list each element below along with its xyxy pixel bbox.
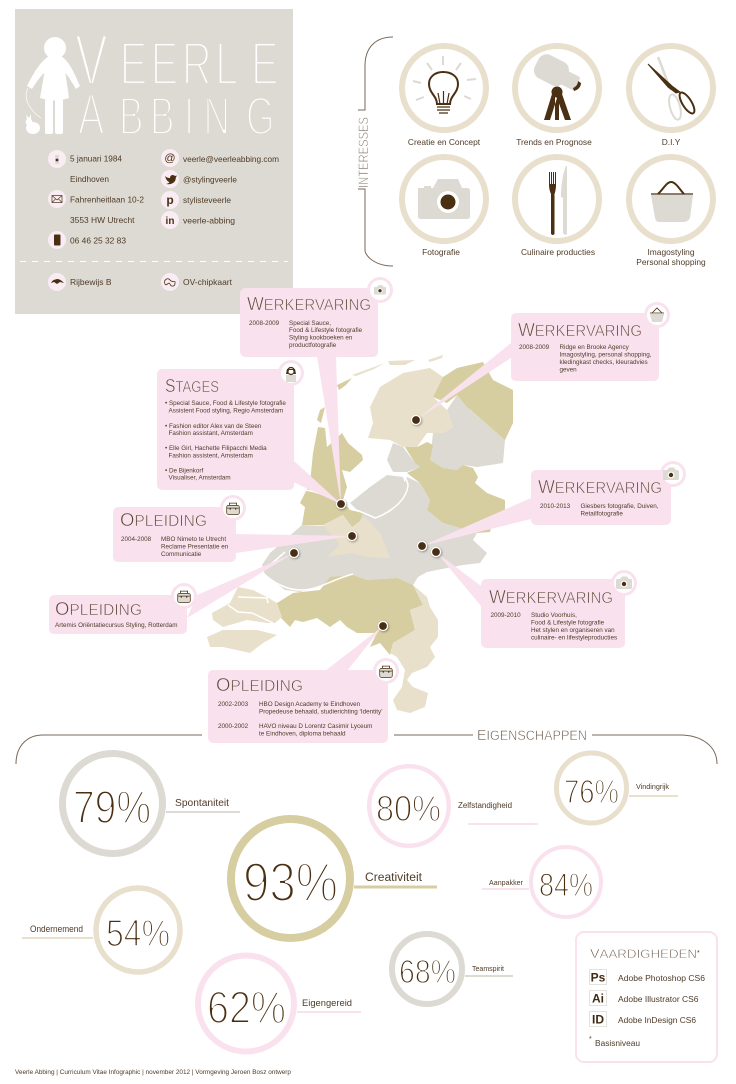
stat: aanpakker 84%: 84% xyxy=(539,867,593,903)
islands: wadden xyxy=(317,378,352,423)
callout: werkervaring ridge en brooke: geven xyxy=(560,366,577,374)
callout: opleiding design academy: te Eindhoven, diploma behaald xyxy=(259,730,346,738)
stat: vindingrijk 76% xyxy=(556,753,678,823)
contact icon: pinterest: p xyxy=(166,193,174,207)
stat: zelfstandigheid 80% xyxy=(369,766,538,846)
contact icon: pinterest xyxy=(161,191,179,209)
title: name: ABBING xyxy=(78,82,281,147)
interest: culinaire producties: Culinaire producties xyxy=(521,247,595,257)
callout: stages: STAGES xyxy=(165,375,219,396)
text: personal details: @stylingveerle xyxy=(183,174,237,184)
text: personal details: Rijbewijs B xyxy=(70,277,112,287)
callout: opleiding design academy: 2000-2002 xyxy=(218,723,249,730)
callout: stages: Fashion assistent, Amsterdam xyxy=(168,452,253,460)
map: the Netherlands xyxy=(207,355,513,713)
callout: stages: Assistent Food styling, Regio Amsterdam xyxy=(168,408,283,414)
icon: basket xyxy=(650,308,664,322)
interest: creatie en concept: Creatie en Concept xyxy=(408,137,481,147)
stat: creativiteit 93% xyxy=(231,819,437,938)
callout: werkervaring studio voorhuis xyxy=(436,552,637,648)
skill: photoshop: Ps xyxy=(591,970,606,984)
callout: werkervaring ridge en brooke: 2008-2009 xyxy=(519,344,550,351)
stat: eigengereid 62% xyxy=(198,956,361,1052)
contact icon: licence xyxy=(48,273,66,291)
contact icon: birth xyxy=(48,150,66,168)
callout: werkervaring 2008-2009 special sauce: Food & Lifestyle fotografie xyxy=(289,327,363,334)
panel: vaardigheden: VAARDIGHEDEN xyxy=(590,946,697,961)
interest: D.I.Y: D.I.Y xyxy=(662,137,681,147)
interest: culinaire producties xyxy=(515,157,599,257)
stat: aanpakker 84%: Aanpakker xyxy=(489,878,524,887)
stat: vindingrijk 76%: Vindingrijk xyxy=(636,782,669,791)
province: limburg xyxy=(390,585,438,713)
text: personal details: 5 januari 1984 xyxy=(70,154,122,164)
province: groningen xyxy=(433,362,513,440)
callout: stages: • Special Sauce, Food & Lifestyle fotografie xyxy=(165,400,286,407)
text: personal details: veerle@veerleabbing.com xyxy=(183,154,279,164)
icon: woman with rabbit xyxy=(26,37,80,134)
province: noord-holland xyxy=(300,427,363,527)
callout: opleiding design academy xyxy=(208,626,399,743)
stat: ondernemend 54%: 54% xyxy=(106,913,170,955)
contact icon: twitter xyxy=(161,170,179,188)
province: flevoland xyxy=(350,475,407,518)
stat: aanpakker 84% xyxy=(482,847,601,917)
text: personal details: 3553 HW Utrecht xyxy=(70,215,135,225)
skill: illustrator xyxy=(590,990,699,1006)
callout: stages xyxy=(157,360,341,504)
panel: profile xyxy=(15,9,293,314)
title: name: VEERLE xyxy=(75,20,282,101)
stat: ondernemend 54%: Ondernemend xyxy=(30,924,83,934)
interest: imagostyling xyxy=(629,157,713,267)
skill: indesign: ID xyxy=(592,1012,604,1026)
callout: werkervaring studio voorhuis: WERKERVARING xyxy=(489,586,613,607)
skill: photoshop xyxy=(590,970,705,984)
text: personal details: veerle-abbing xyxy=(183,216,235,226)
panel: interesses xyxy=(355,37,713,267)
callout: werkervaring ridge en brooke: Ridge en Brooke Agency xyxy=(560,344,630,351)
skill: illustrator: Ai xyxy=(592,992,604,1006)
stat: spontaniteit 79%: 79% xyxy=(73,781,151,833)
stat: teamspirit 68%: 68% xyxy=(399,953,456,990)
contact icon: phone xyxy=(48,231,66,249)
stat: teamspirit 68% xyxy=(392,934,513,1004)
province: zeeland xyxy=(207,587,282,653)
province: gray west and centre xyxy=(262,477,487,592)
skill: indesign: Adobe InDesign CS6 xyxy=(618,1015,696,1025)
stat: eigengereid 62%: Eigengereid xyxy=(302,998,352,1009)
callout: opleiding design academy: 2002-2003 xyxy=(218,701,249,708)
callout: werkervaring 2008-2009 special sauce: 2008-2009 xyxy=(249,320,280,327)
section: eigenschappen heading xyxy=(16,727,717,764)
callout: opleiding design academy: HBO Design Academy te Eindhoven xyxy=(259,701,361,708)
stat: spontaniteit 79% xyxy=(62,754,240,854)
contact icon: at: @ xyxy=(164,152,176,164)
province: friesland xyxy=(368,368,453,447)
callout: werkervaring studio voorhuis: Het stylen en organiseren van xyxy=(531,627,615,634)
stat: zelfstandigheid 80%: 80% xyxy=(376,788,441,829)
interest: imagostyling: Imagostyling xyxy=(647,247,695,257)
interest: trends en prognose: Trends en Prognose xyxy=(516,137,592,147)
skill: photoshop: Adobe Photoshop CS6 xyxy=(618,973,705,983)
stat: zelfstandigheid 80%: Zelfstandigheid xyxy=(458,801,512,810)
text: personal details: 06 46 25 32 83 xyxy=(70,236,126,246)
panel: vaardigheden: * xyxy=(589,1036,592,1043)
province: utrecht xyxy=(323,515,390,558)
province: overijssel xyxy=(405,442,505,533)
rivers xyxy=(228,472,408,623)
callout: werkervaring giesbers: Retailfotografie xyxy=(580,510,623,518)
contact icon: linkedin xyxy=(161,211,179,229)
stat: eigengereid 62%: 62% xyxy=(207,982,286,1033)
callout: opleiding MBO: Communicatie xyxy=(161,551,202,558)
text: personal details: OV-chipkaart xyxy=(183,277,233,287)
callout: werkervaring 2008-2009 special sauce xyxy=(240,277,393,504)
text: personal details: Fahrenheitlaan 10-2 xyxy=(70,194,144,204)
callout: werkervaring studio voorhuis: culinaire- en lifestyleproducties xyxy=(531,634,617,642)
icon: stagiair xyxy=(286,368,296,382)
callout: werkervaring ridge en brooke: kledingkast checks, kleuradvies xyxy=(560,359,648,366)
callout: werkervaring giesbers: Giesbers fotografie, Duiven, xyxy=(580,503,659,510)
contact icon: ov card xyxy=(161,273,179,291)
callout: werkervaring giesbers: 2010-2013 xyxy=(540,503,571,510)
callout: werkervaring giesbers xyxy=(422,461,686,546)
callout: stages: • De Bijenkorf xyxy=(165,468,204,474)
callout: werkervaring 2008-2009 special sauce: productfotografie xyxy=(289,342,337,349)
callout: stages: • Fashion editor Alex van de Steen xyxy=(165,423,262,430)
callout: opleiding MBO: Reclame Presentatie en xyxy=(161,544,229,550)
callout: opleiding artemis xyxy=(49,553,294,634)
text: personal details: stylisteveerle xyxy=(183,195,231,205)
stat: teamspirit 68%: Teamspirit xyxy=(472,964,504,973)
stat: creativiteit 93%: 93% xyxy=(243,851,338,913)
callout: opleiding design academy: Propedeuse behaald, studierichting ‘Identity’ xyxy=(259,708,383,716)
province: noord-brabant xyxy=(277,575,423,655)
interest: D.I.Y xyxy=(629,46,713,147)
callout: werkervaring ridge en brooke: Imagostyling, personal shopping, xyxy=(560,352,652,358)
callout: opleiding artemis: OPLEIDING xyxy=(55,598,142,619)
map location markers xyxy=(290,416,440,630)
callout: opleiding MBO: OPLEIDING xyxy=(120,509,207,530)
heading: interesses: INTERESSES xyxy=(355,117,371,188)
contact icon: mail xyxy=(48,190,66,208)
callout: opleiding MBO: MBO Nimeto te Utrecht xyxy=(161,536,226,543)
callout: stages: Visualiser, Amsterdam xyxy=(168,474,231,482)
callout: opleiding MBO xyxy=(113,495,352,562)
contact icon: at xyxy=(161,149,179,167)
callout: werkervaring ridge en brooke: WERKERVARING xyxy=(518,319,642,340)
interest: fotografie: Fotografie xyxy=(422,247,460,257)
footer credit: Veerle Abbing | Curriculum Vitae Infographic | november 2012 | Vormgeving Jeroen Bosz ontwerp xyxy=(15,1069,292,1076)
stat: spontaniteit 79%: Spontaniteit xyxy=(175,798,229,809)
interest: imagostyling: Personal shopping xyxy=(636,257,706,267)
callout: werkervaring studio voorhuis: Food & Lifestyle fotografie xyxy=(531,620,605,626)
callout: opleiding artemis: Artemis Oriëntatiecursus Styling, Rotterdam xyxy=(55,622,177,629)
panel: vaardigheden: * xyxy=(697,950,700,957)
callout: opleiding MBO: 2004-2008 xyxy=(121,536,152,543)
stat: creativiteit 93%: Creativiteit xyxy=(365,872,423,884)
title: name xyxy=(75,20,282,147)
callout: werkervaring studio voorhuis: 2009-2010 xyxy=(490,612,521,619)
callout: stages: Fashion assistant, Amsterdam xyxy=(168,430,253,437)
callout: werkervaring giesbers: WERKERVARING xyxy=(538,476,662,497)
callout: opleiding design academy: OPLEIDING xyxy=(216,674,303,695)
interest: fotografie xyxy=(402,157,486,257)
bracket xyxy=(358,37,393,266)
callout: werkervaring studio voorhuis: Studio Voorhuis, xyxy=(531,612,577,619)
skill: indesign xyxy=(590,1012,696,1026)
contact icon: linkedin: in xyxy=(166,216,174,227)
skill: illustrator: Adobe Illustrator CS6 xyxy=(618,994,699,1004)
text: personal details xyxy=(70,154,279,287)
section: eigenschappen heading: EIGENSCHAPPEN xyxy=(477,727,587,744)
panel: vaardigheden xyxy=(576,932,717,1062)
interest: trends en prognose xyxy=(515,46,599,147)
callout: werkervaring 2008-2009 special sauce: Special Sauce, xyxy=(289,320,331,327)
callout: werkervaring 2008-2009 special sauce: Styling kookboeken en xyxy=(289,334,353,342)
panel: vaardigheden: Basisniveau xyxy=(595,1038,640,1048)
callout: werkervaring 2008-2009 special sauce: WERKERVARING xyxy=(247,293,371,314)
stat: vindingrijk 76%: 76% xyxy=(564,773,619,810)
province: drenthe xyxy=(430,395,505,470)
interest: creatie en concept xyxy=(402,46,486,147)
callout: werkervaring ridge en brooke xyxy=(416,302,670,420)
callout: stages: • Elle Girl, Hachette Filipacchi Media xyxy=(165,445,267,452)
stat: ondernemend 54% xyxy=(22,888,180,972)
text: personal details: Eindhoven xyxy=(70,174,109,184)
province: noordoostpolder xyxy=(387,443,420,472)
callout: opleiding design academy: HAVO niveau D Lorentz Casimir Lyceum xyxy=(259,723,372,730)
